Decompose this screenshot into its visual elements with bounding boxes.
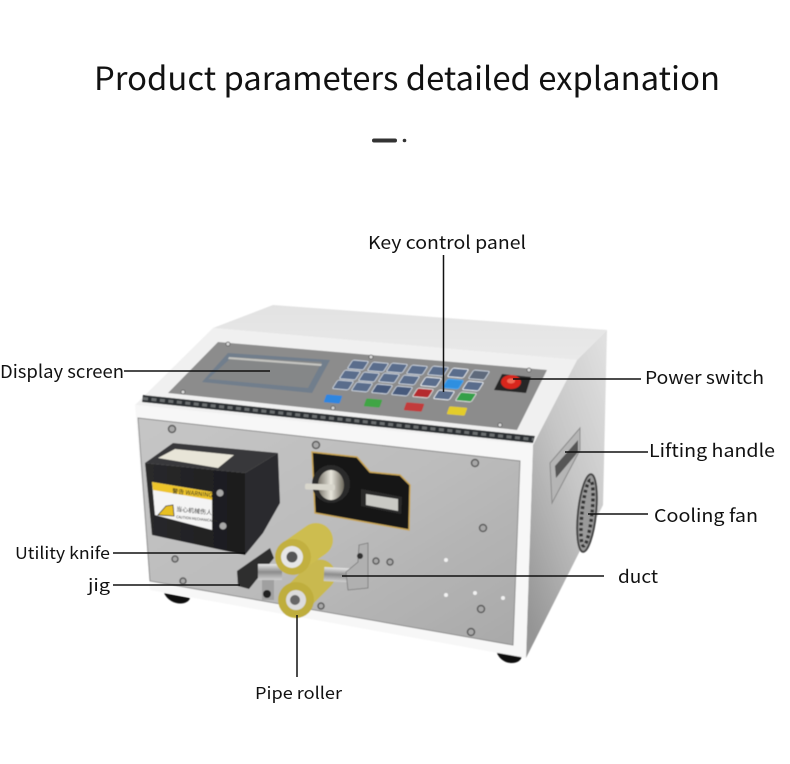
perforated black strip: [142, 395, 535, 443]
right side wall: [526, 330, 607, 658]
callout: jig: jig: [87, 572, 111, 596]
upper pipe roller: [275, 539, 316, 575]
black cutter box: [145, 443, 280, 555]
top warning sticker: [158, 449, 234, 468]
steel front plate: [138, 418, 520, 645]
callout: Power switch: Power switch: [645, 364, 764, 390]
plate screws: [168, 426, 486, 636]
control panel plate: [168, 342, 547, 430]
callout: Utility knife: Utility knife: [15, 540, 110, 564]
black gauge panel with yellow border: [305, 452, 410, 530]
callout: Cooling fan: Cooling fan: [654, 502, 758, 528]
left foot: [164, 593, 190, 603]
selector knob: [305, 465, 350, 503]
key control panel keys: [324, 360, 490, 416]
carrying handle: [550, 428, 580, 503]
right foot: [496, 650, 522, 663]
callout: duct: duct: [618, 563, 658, 589]
white front housing: [135, 405, 533, 658]
callout: Key control panel: Key control panel: [368, 229, 526, 255]
sloped top of housing: [135, 328, 577, 445]
display screen: [202, 353, 330, 393]
gauge window: [361, 489, 402, 514]
callout: Pipe roller: [255, 615, 343, 704]
roller spindle and duct bracket: [324, 543, 368, 590]
plate holes: [444, 558, 505, 600]
callout: Display screen: Display screen: [0, 358, 124, 384]
cooling fan: [574, 473, 600, 553]
warning label: [152, 482, 226, 530]
power switch: [494, 374, 531, 393]
lower pipe roller: [278, 575, 320, 618]
machine illustration: [135, 305, 607, 663]
title: Product parameters detailed explanation: [94, 54, 720, 100]
warning label: 警告 WARNING: [172, 486, 213, 499]
jig block: [237, 548, 282, 600]
warning label: CAUTION MECHANICAL INJURY: [176, 515, 226, 525]
top cover: [213, 305, 607, 360]
callout: Lifting handle: Lifting handle: [649, 437, 775, 463]
panel screws: [181, 342, 531, 427]
callout: Pipe roller: Pipe roller: [255, 680, 343, 704]
title accent: dash and dot: [372, 138, 406, 142]
warning label: 当心机械伤人: [176, 504, 213, 517]
